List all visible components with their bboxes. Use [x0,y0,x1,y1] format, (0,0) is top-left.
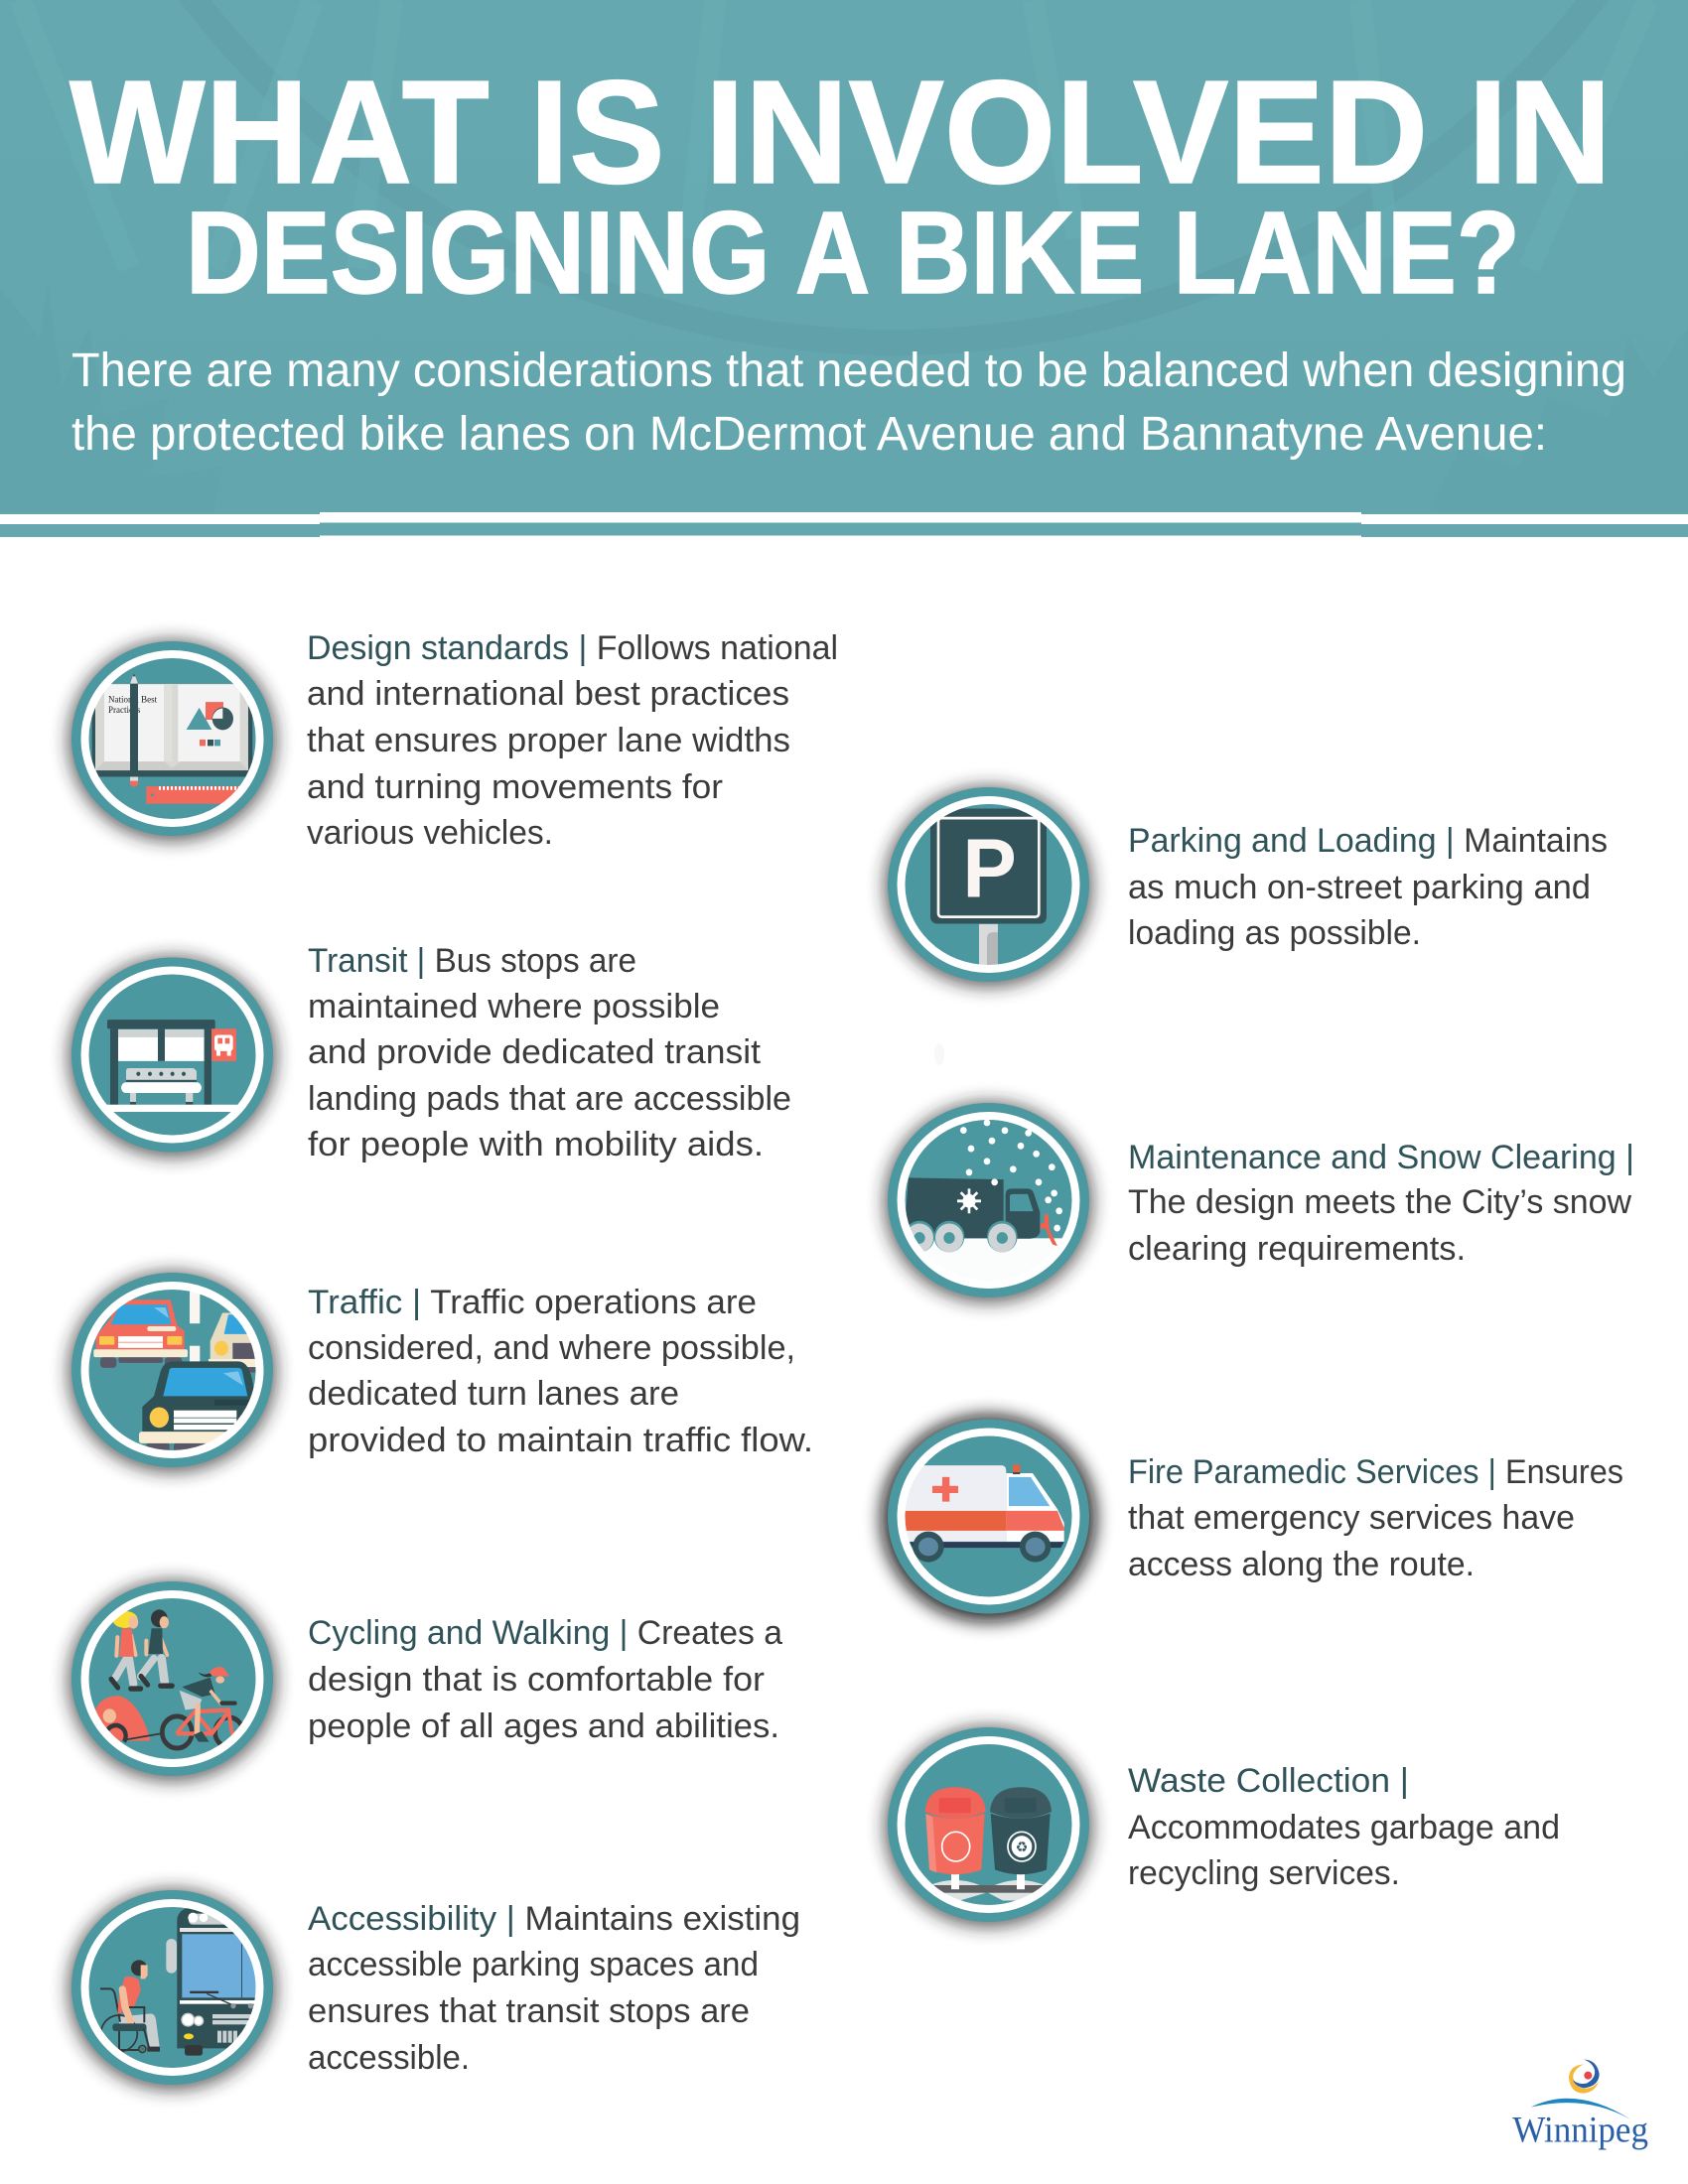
icon: design standards: Practices [108,706,141,716]
text: design standards: that ensures proper lane widths [307,722,790,759]
title: DESIGNING A BIKE LANE? [186,188,1520,319]
text: traffic: provided to maintain traffic flow. [308,1422,813,1459]
header banner [0,0,1688,514]
intro text: There are many considerations that needed to be balanced when designing [71,344,1626,397]
text: waste collection: Waste Collection | [1128,1762,1409,1800]
text: cycling and walking [308,1614,782,1745]
text: design standards: Design standards | Follows national [307,629,838,667]
text: waste collection [1128,1762,1560,1892]
text: cycling and walking: people of all ages and abilities. [308,1707,779,1745]
text: fire paramedic services: access along the route. [1128,1546,1475,1583]
text: fire paramedic services [1128,1453,1623,1583]
text: accessibility: accessible. [308,2039,470,2077]
text: transit: Transit | Bus stops are [308,942,636,980]
text: transit: maintained where possible [308,988,720,1025]
text: cycling and walking: Cycling and Walking | Creates a [308,1614,782,1652]
icon: design standards: National Best [108,695,158,706]
intro text [71,344,1626,461]
icon: waste bins [885,1726,1092,1927]
logo: Winnipeg [1512,2060,1648,2150]
text: traffic [308,1284,813,1459]
icon: waste bins: ♻ [1016,1840,1028,1855]
text: accessibility: ensures that transit stops are [308,1992,750,2030]
text: accessibility: accessible parking spaces and [308,1946,759,1983]
icon: snow clearing [885,1102,1092,1302]
header bands [0,512,1688,537]
text: maintenance and snow clearing [1128,1139,1634,1268]
text: transit: for people with mobility aids. [308,1126,764,1163]
text: transit: and provide dedicated transit [308,1033,762,1071]
text: traffic: Traffic | Traffic operations are [308,1284,757,1321]
text: design standards [307,629,838,852]
text: traffic: dedicated turn lanes are [308,1375,679,1413]
text: accessibility [308,1900,800,2077]
intro text: the protected bike lanes on McDermot Avenue and Bannatyne Avenue: [71,408,1547,461]
icon: ambulance [882,1416,1096,1622]
text: design standards: various vehicles. [307,814,553,852]
icon: traffic [69,1272,276,1472]
faint snowflake mark [934,1043,944,1065]
text: parking and loading: as much on-street parking and [1128,869,1591,906]
text: traffic: considered, and where possible, [308,1329,795,1367]
text: fire paramedic services: Fire Paramedic Services | Ensures [1128,1453,1623,1491]
text: design standards: and international best practices [307,675,789,713]
text: waste collection: recycling services. [1128,1854,1400,1892]
icon: transit [69,957,276,1158]
text: transit: landing pads that are accessible [308,1080,791,1118]
text: waste collection: Accommodates garbage and [1128,1809,1560,1846]
text: maintenance and snow clearing: Maintenance and Snow Clearing | [1128,1139,1634,1176]
text: transit [308,942,791,1163]
icon: cycling and walking [69,1580,276,1781]
icon: parking sign [885,786,1092,987]
icon: accessibility [69,1889,276,2090]
icon: parking sign: P [962,821,1017,915]
logo: Winnipeg: Winnipeg [1512,2110,1648,2150]
text: parking and loading: Parking and Loading | Maintains [1128,822,1608,860]
text: parking and loading [1128,822,1608,952]
title: WHAT IS INVOLVED IN [70,51,1612,214]
text: parking and loading: loading as possible. [1128,914,1421,952]
text: maintenance and snow clearing: The design meets the City’s snow [1128,1183,1631,1221]
text: fire paramedic services: that emergency services have [1128,1499,1575,1537]
text: cycling and walking: design that is comfortable for [308,1661,765,1699]
text: design standards: and turning movements for [307,768,723,806]
icon: design standards [69,640,276,841]
text: accessibility: Accessibility | Maintains existing [308,1900,800,1938]
text: maintenance and snow clearing: clearing requirements. [1128,1230,1466,1268]
title [70,51,1612,319]
